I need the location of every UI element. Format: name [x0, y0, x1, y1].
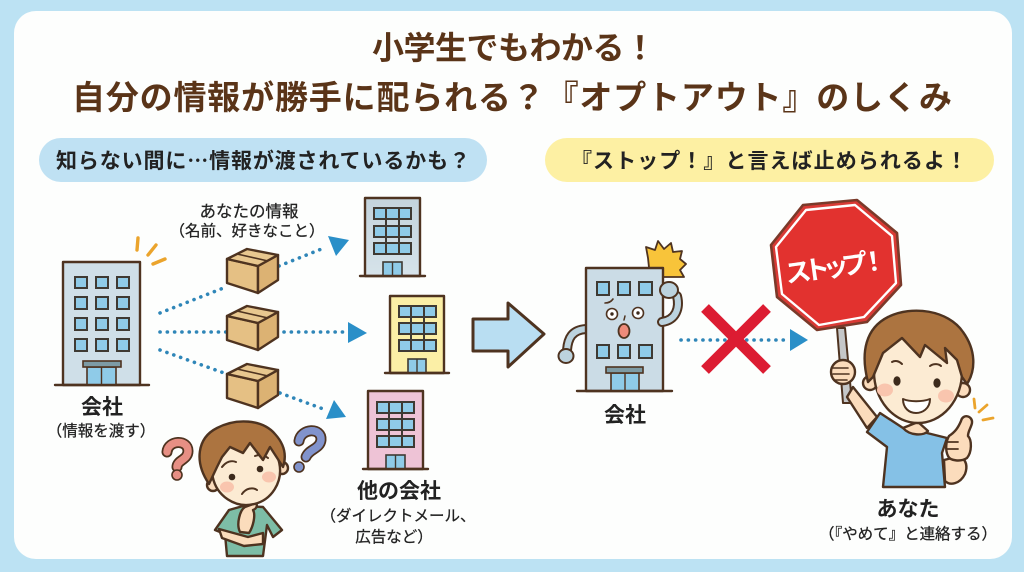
- label: other companies: [320, 480, 476, 546]
- icon: worried child: [200, 421, 288, 556]
- icon: pink company: [363, 391, 428, 469]
- title: [72, 30, 952, 116]
- title: 自分の情報が勝手に配られる？『オプトアウト』のしくみ: [72, 79, 952, 116]
- label: you: （『やめて』と連絡する）: [819, 525, 997, 543]
- icon: happy child: [831, 311, 993, 487]
- label: other companies: 広告など）: [355, 528, 433, 546]
- icon: main company building: [55, 238, 165, 385]
- label: company: 会社: [81, 396, 123, 419]
- icon: blue question mark: [294, 431, 321, 472]
- icon: surprised company character: [558, 241, 686, 391]
- icon: red question mark: [167, 442, 188, 480]
- label: your information: [169, 202, 325, 240]
- icon: gray company: [360, 198, 425, 276]
- label: your information: （名前、好きなこと）: [169, 222, 325, 240]
- icon: red cross: [705, 308, 767, 370]
- label: other companies: 他の会社: [357, 480, 441, 503]
- icon: yellow company: [385, 296, 449, 373]
- icon: stop sign: ストップ！: [783, 245, 888, 289]
- heading: left section: 知らない間に…情報が渡されているかも？: [56, 145, 470, 175]
- title: 小学生でもわかる！: [372, 30, 656, 66]
- label: company: [47, 396, 155, 440]
- label: you: あなた: [876, 498, 940, 521]
- icon: parcel middle: [227, 306, 278, 350]
- icon: parcel bottom: [227, 364, 278, 408]
- label: other companies: （ダイレクトメール、: [320, 507, 476, 525]
- label: company right: 会社: [604, 404, 646, 427]
- icon: stop sign: [771, 200, 901, 403]
- icon: parcel top: [227, 249, 278, 293]
- label: company: （情報を渡す）: [47, 422, 155, 440]
- label: your information: あなたの情報: [200, 202, 299, 221]
- arrow: flow to gray company: [160, 236, 349, 313]
- arrow: flow to pink company: [160, 350, 346, 419]
- arrow: blocked flow: [681, 329, 808, 351]
- heading: right section: 『ストップ！』と言えば止められるよ！: [571, 150, 967, 173]
- arrow: flow to yellow company: [160, 322, 367, 343]
- label: you: [819, 498, 997, 543]
- heading: right section: [545, 138, 994, 182]
- heading: left section: [39, 138, 487, 182]
- arrow: big transition arrow: [473, 303, 544, 367]
